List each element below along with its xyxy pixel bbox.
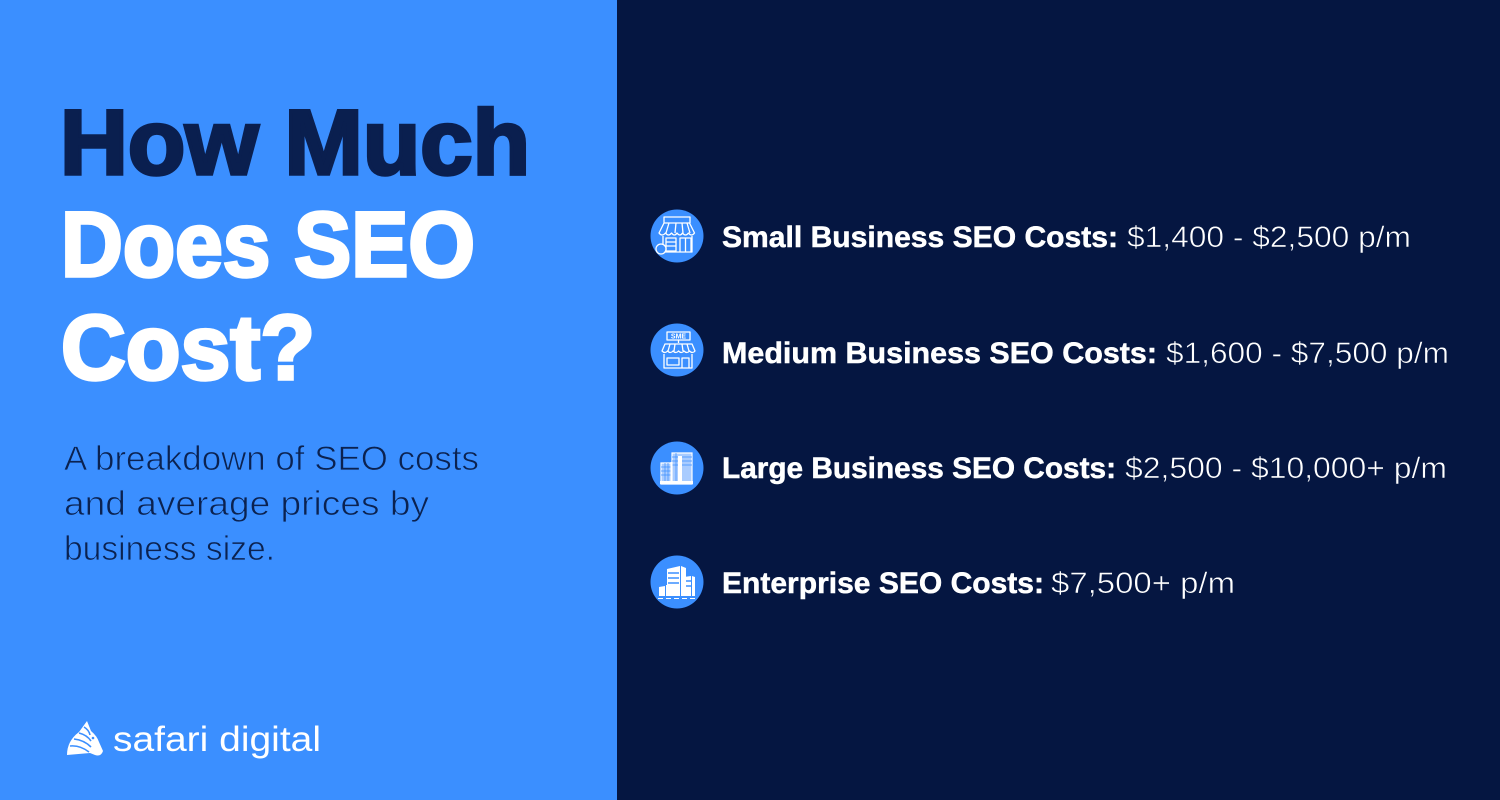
subtitle: A breakdown of SEO costs <box>64 440 479 478</box>
row: small business: $1,400 - $2,500 p/m <box>1127 221 1411 254</box>
subtitle: and average prices by <box>64 485 429 523</box>
row: large business: $2,500 - $10,000+ p/m <box>1125 452 1447 485</box>
row: medium business <box>650 324 1449 376</box>
row: small business <box>650 210 1411 262</box>
text: small business cost: Small Business SEO Costs: <box>722 221 1118 254</box>
icon: SME shop <box>650 324 704 376</box>
subtitle <box>64 440 479 568</box>
row: enterprise <box>650 556 1235 608</box>
panel: left background <box>0 0 617 800</box>
icon: small shop <box>650 210 704 262</box>
logo: safari digital <box>67 720 321 759</box>
icon: SME shop: SME <box>671 334 686 340</box>
title: How Much <box>60 92 530 194</box>
row: enterprise: $7,500+ p/m <box>1051 567 1235 600</box>
text: enterprise cost: Enterprise SEO Costs: <box>722 567 1044 600</box>
icon: office buildings <box>650 442 704 494</box>
title: Does SEO <box>61 194 475 296</box>
text: medium business cost: Medium Business SEO Costs: <box>722 337 1157 370</box>
row: large business <box>650 442 1447 494</box>
row: medium business: $1,600 - $7,500 p/m <box>1166 337 1449 370</box>
icon: zebra head <box>67 721 103 756</box>
text: large business cost: Large Business SEO Costs: <box>722 452 1116 485</box>
title <box>60 92 530 399</box>
logo wordmark: safari digital <box>113 720 321 759</box>
icon: enterprise towers <box>650 556 704 608</box>
subtitle: business size. <box>64 530 275 568</box>
panel: right background <box>617 0 1500 800</box>
title: Cost? <box>61 297 315 399</box>
